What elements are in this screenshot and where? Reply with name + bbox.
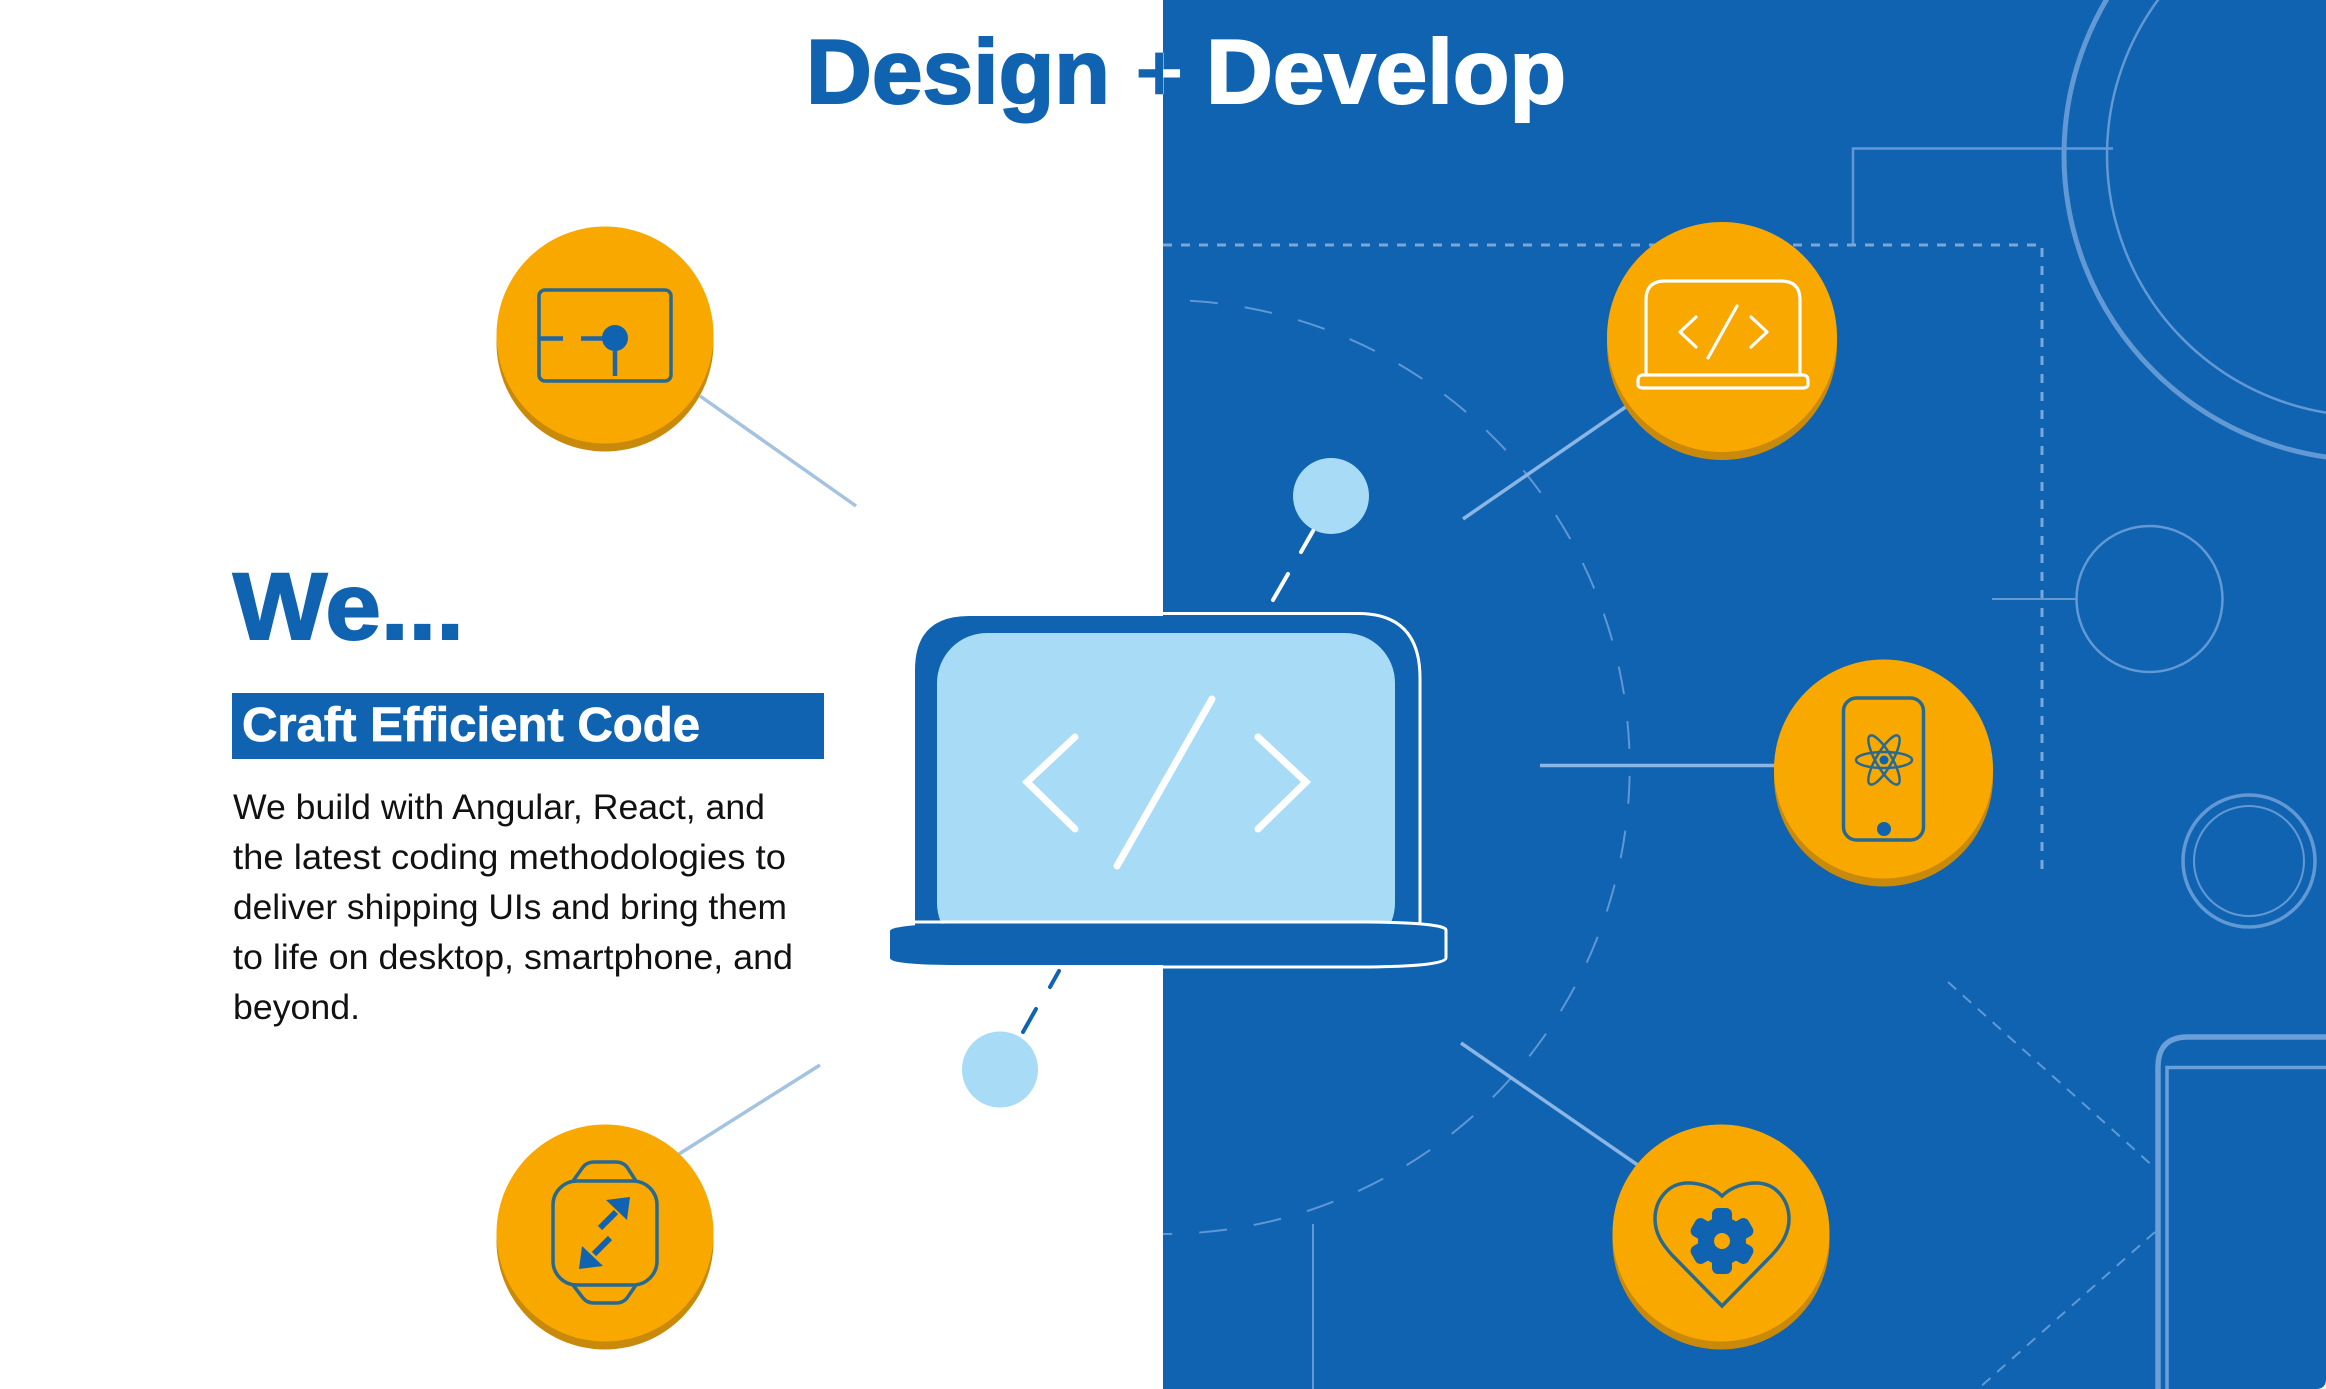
icon badge: phone with atom bbox=[1774, 660, 1993, 886]
heading: We...: We... bbox=[233, 554, 464, 660]
title bbox=[806, 22, 1566, 123]
blueprint background decoration bbox=[1163, 0, 2326, 1389]
panel: blue right half bbox=[1163, 0, 2326, 1389]
icon badge: laptop code bbox=[1607, 222, 1837, 460]
icon badge: UI control bbox=[496, 226, 714, 452]
icon: gear bbox=[1688, 1208, 1756, 1274]
body text: to life on desktop, smartphone, and bbox=[233, 938, 793, 977]
body text: We build with Angular, React, and bbox=[233, 788, 765, 827]
connector lines bbox=[679, 396, 1780, 1168]
title: Develop bbox=[1206, 22, 1566, 123]
node: top light circle with dashes bbox=[1273, 458, 1369, 600]
subheading banner: Craft Efficient Code bbox=[242, 699, 700, 752]
body text: deliver shipping UIs and bring them bbox=[233, 888, 787, 927]
body text: the latest coding methodologies to bbox=[233, 838, 786, 877]
title: Design bbox=[806, 22, 1110, 123]
icon badge: smartwatch resize bbox=[496, 1124, 714, 1350]
body text: beyond. bbox=[233, 988, 360, 1027]
central laptop bbox=[890, 614, 1446, 967]
icon badge: heart with gear bbox=[1612, 1124, 1830, 1350]
body text bbox=[233, 788, 793, 1027]
node: bottom light circle with dashes bbox=[962, 971, 1059, 1108]
subheading banner bbox=[232, 693, 824, 759]
icon: code brackets on laptop screen bbox=[1027, 699, 1306, 866]
title: + bbox=[1136, 28, 1183, 117]
